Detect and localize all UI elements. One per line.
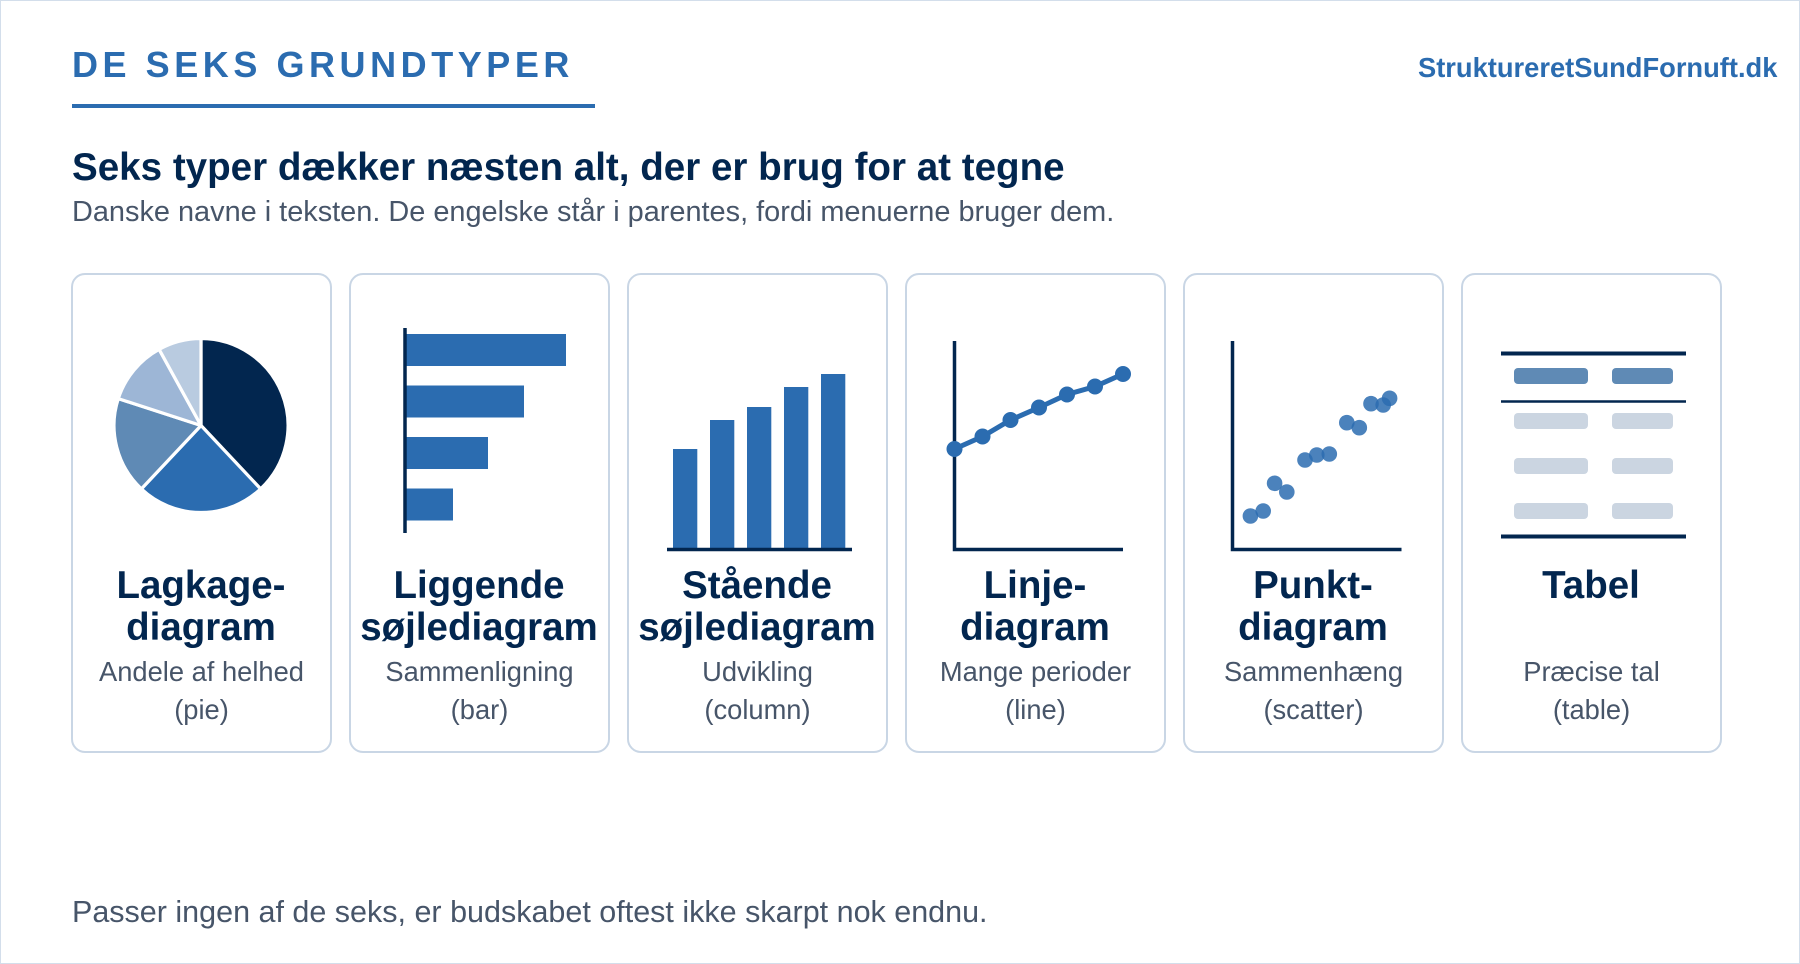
title: DE SEKS GRUNDTYPER (72, 44, 574, 85)
subheading: Danske navne i teksten. De engelske står i parentes, fordi menuerne bruger dem. (72, 196, 1114, 228)
footer note: Passer ingen af de seks, er budskabet oftest ikke skarpt nok endnu. (72, 895, 988, 929)
icon: horizontal bars (403, 328, 566, 533)
label: scatter (1238, 564, 1388, 648)
panel: bar chart card (349, 273, 610, 753)
description: column: (column) (704, 694, 811, 725)
description: pie: Andele af helhed (99, 656, 304, 687)
label: line (960, 564, 1110, 648)
description: pie: (pie) (174, 694, 229, 725)
label: line: Linje- (984, 564, 1086, 607)
description: table: (table) (1553, 694, 1630, 725)
panel: table card (1461, 273, 1722, 753)
label: bar: Liggende (393, 564, 565, 607)
description: table (1523, 656, 1660, 725)
label: column (638, 564, 876, 648)
label: scatter: diagram (1238, 606, 1388, 648)
label: table: Tabel (1542, 564, 1640, 607)
heading: Seks typer dækker næsten alt, der er brug for at tegne (72, 146, 1065, 189)
website name: StruktureretSundFornuft.dk (1418, 52, 1777, 83)
panel: column chart card (627, 273, 888, 753)
description: bar: Sammenligning (385, 656, 574, 687)
label: bar: søjlediagram (360, 606, 598, 648)
icon: line chart (946, 341, 1131, 552)
label: pie: diagram (126, 606, 276, 648)
description: line (940, 656, 1131, 725)
description: line: Mange perioder (940, 656, 1131, 687)
icon: table (1501, 352, 1686, 538)
description: bar: (bar) (451, 694, 508, 725)
panel: pie chart card (71, 273, 332, 753)
description: line: (line) (1005, 694, 1066, 725)
panel: scatter chart card (1183, 273, 1444, 753)
label: pie: Lagkage- (116, 564, 286, 607)
description: scatter (1224, 656, 1403, 725)
label: scatter: Punkt- (1253, 564, 1373, 607)
panel: line chart card (905, 273, 1166, 753)
description: scatter: (scatter) (1263, 694, 1364, 725)
title underline (72, 104, 595, 108)
description: scatter: Sammenhæng (1224, 656, 1403, 687)
label: column: Stående (682, 564, 832, 607)
icon: columns (667, 374, 852, 552)
icon: scatter plot (1230, 341, 1402, 552)
label: pie (116, 564, 286, 648)
icon: pie chart (116, 340, 286, 511)
label: bar (360, 564, 598, 648)
description: column: Udvikling (702, 656, 813, 687)
description: table: Præcise tal (1523, 656, 1660, 687)
description: bar (385, 656, 574, 725)
label: column: søjlediagram (638, 606, 876, 648)
label: line: diagram (960, 606, 1110, 648)
description: column (702, 656, 813, 725)
description: pie (99, 656, 304, 725)
